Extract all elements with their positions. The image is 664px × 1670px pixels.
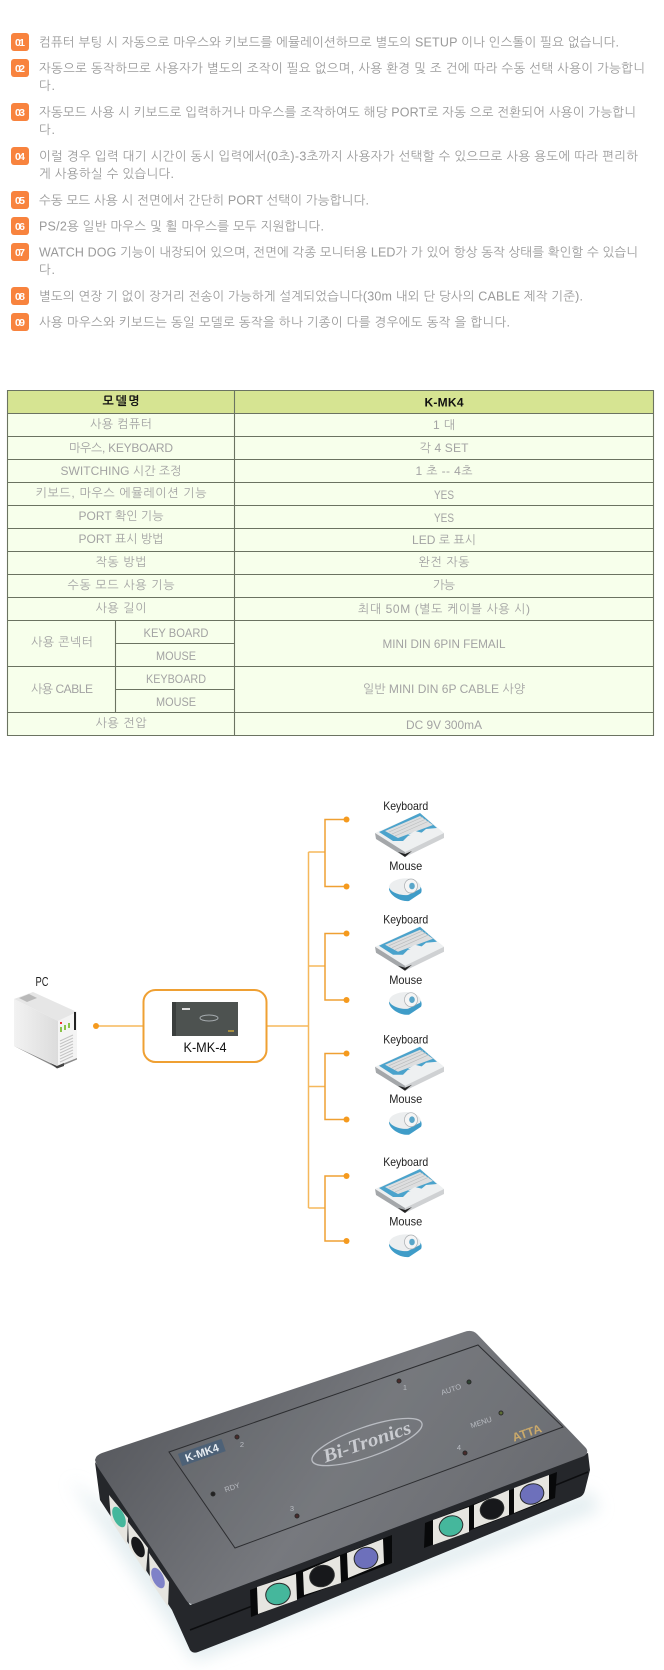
- item 04: 이럴 경우 입력 대기 시간이 동시 입력에서(0초)-3초까지 사용자가 선택할 수 있으므로 사용 용도에 따라 편리하: [39, 150, 638, 164]
- table rows: [31, 417, 530, 732]
- panel labels: MENU: [469, 1415, 493, 1430]
- item 09: 09: [15, 317, 25, 329]
- table rows: 사용 CABLE: [31, 682, 93, 696]
- item 01: 컴퓨터 부팅 시 자동으로 마우스와 키보드를 에뮬레이션하므로 별도의 SETUP 이나 인스톨이 필요 없습니다.: [39, 36, 619, 50]
- device group 4: Keyboard: [383, 1155, 428, 1169]
- panel labels: RDY: [223, 1481, 241, 1494]
- table rows: 마우스, KEYBOARD: [69, 441, 173, 455]
- table rows: 완전 자동: [418, 555, 470, 569]
- table rows: 사용 컴퓨터: [90, 417, 152, 431]
- front ports: [250, 1472, 557, 1617]
- device group 3: Keyboard: [383, 1033, 428, 1047]
- table rows: KEYBOARD: [146, 672, 206, 686]
- table rows: SWITCHING 시간 조정: [60, 464, 182, 478]
- table rows: 1 대: [433, 418, 455, 432]
- table rows: 가능: [433, 578, 455, 592]
- item 04: 게 사용하실 수 있습니다.: [39, 167, 174, 181]
- item 03: 자동모드 사용 시 키보드로 입력하거나 마우스를 조작하여도 해당 PORT로 자동 으로 전환되어 사용이 가능합니: [39, 106, 636, 120]
- product photo: [70, 1331, 600, 1662]
- table rows: 사용 콘넥터: [31, 635, 93, 649]
- table rows: PORT 확인 기능: [78, 509, 164, 523]
- connector dots: [93, 816, 350, 1244]
- LEDs: [211, 1379, 503, 1518]
- item 01: 01: [15, 37, 25, 49]
- device group 3: [375, 1033, 444, 1135]
- item 07: WATCH DOG 기능이 내장되어 있으며, 전면에 각종 모니터용 LED가 가 있어 항상 동작 상태를 확인할 수 있습니: [39, 246, 638, 260]
- table rows: MOUSE: [156, 695, 196, 709]
- table rows: 키보드, 마우스 에뮬레이션 기능: [36, 486, 206, 500]
- K-MK-4 switch box: [144, 990, 266, 1062]
- item 06: PS/2용 일반 마우스 및 휠 마우스를 모두 지원합니다.: [39, 220, 324, 234]
- device group 1: Mouse: [389, 859, 422, 873]
- item 07: 다.: [39, 263, 55, 277]
- table rows: 일반 MINI DIN 6P CABLE 사양: [363, 682, 525, 696]
- body sides: [95, 1453, 590, 1653]
- table header: [8, 390, 654, 414]
- device group 2: [375, 913, 444, 1015]
- item 05: 05: [15, 195, 25, 207]
- panel labels: [223, 1382, 493, 1513]
- table rows: 사용 전압: [96, 716, 146, 730]
- table rows: MINI DIN 6PIN FEMAIL: [382, 637, 506, 651]
- table header: K-MK4: [424, 396, 464, 410]
- reflection shadow: [70, 1480, 600, 1662]
- device group 4: [375, 1155, 444, 1257]
- connector lines: [96, 820, 347, 1241]
- item 03: [11, 103, 636, 137]
- item 02: [11, 59, 645, 93]
- item 08: 08: [15, 291, 25, 303]
- PC tower icon: [14, 974, 77, 1068]
- table rows: KEY BOARD: [144, 626, 209, 640]
- item 07: 07: [15, 247, 25, 259]
- panel outline: [169, 1345, 563, 1548]
- item 07: [11, 243, 638, 277]
- item 05: 수동 모드 사용 시 전면에서 간단히 PORT 선택이 가능합니다.: [39, 194, 369, 208]
- item 04: 04: [15, 151, 25, 163]
- device group 2: Mouse: [389, 973, 422, 987]
- table header: 모델명: [102, 394, 140, 408]
- model tag: K-MK4: [184, 1442, 221, 1465]
- table rows: 수동 모드 사용 기능: [68, 578, 174, 592]
- table rows: PORT 표시 방법: [78, 532, 164, 546]
- item 09: 사용 마우스와 키보드는 동일 모델로 동작을 하나 기종이 다를 경우에도 동작 을 합니다.: [39, 316, 510, 330]
- device group 1: Keyboard: [383, 799, 428, 813]
- item 02: 다.: [39, 79, 55, 93]
- model tag: [178, 1439, 226, 1467]
- top face: [95, 1331, 587, 1604]
- side ports: [109, 1495, 169, 1607]
- item 03: 03: [15, 107, 25, 119]
- table rows: 각 4 SET: [420, 441, 469, 455]
- device group 1: [375, 799, 444, 901]
- item 04: [11, 147, 638, 181]
- panel labels: 1: [403, 1383, 407, 1392]
- device group 2: Keyboard: [383, 913, 428, 927]
- spec table: [8, 390, 654, 736]
- K-MK-4 switch box: K-MK-4: [184, 1039, 227, 1055]
- item 02: 02: [15, 63, 25, 75]
- table rows: YES: [434, 488, 454, 502]
- table rows: MOUSE: [156, 649, 196, 663]
- feature list: [11, 33, 645, 331]
- table rows: DC 9V 300mA: [406, 718, 482, 732]
- item 06: 06: [15, 221, 25, 233]
- table rows: 최대 50M (별도 케이블 사용 시): [358, 602, 530, 616]
- device group 3: Mouse: [389, 1092, 422, 1106]
- panel labels: 4: [457, 1443, 461, 1452]
- Bi-Tronics logo: Bi-Tronics: [319, 1418, 414, 1468]
- item 03: 다.: [39, 123, 55, 137]
- panel labels: 2: [240, 1440, 244, 1449]
- panel labels: 3: [290, 1504, 294, 1513]
- ATTA logo: ATTA: [510, 1421, 544, 1445]
- item 08: 별도의 연장 기 없이 장거리 전송이 가능하게 설계되었습니다(30m 내외 단 당사의 CABLE 제작 기준).: [39, 290, 583, 304]
- item 02: 자동으로 동작하므로 사용자가 별도의 조작이 필요 없으며, 사용 환경 및 조 건에 따라 수동 선택 사용이 가능합니: [39, 62, 645, 76]
- panel labels: AUTO: [440, 1382, 463, 1397]
- table rows: 사용 길이: [96, 601, 146, 615]
- connection diagram: [14, 799, 444, 1257]
- table rows: YES: [434, 511, 454, 525]
- Bi-Tronics logo: [307, 1409, 427, 1475]
- table rows: 1 초 -- 4초: [416, 464, 472, 478]
- table rows: LED 로 표시: [412, 533, 476, 547]
- table rows: 작동 방법: [96, 555, 146, 569]
- PC tower icon: PC: [36, 974, 48, 989]
- device group 4: Mouse: [389, 1214, 422, 1228]
